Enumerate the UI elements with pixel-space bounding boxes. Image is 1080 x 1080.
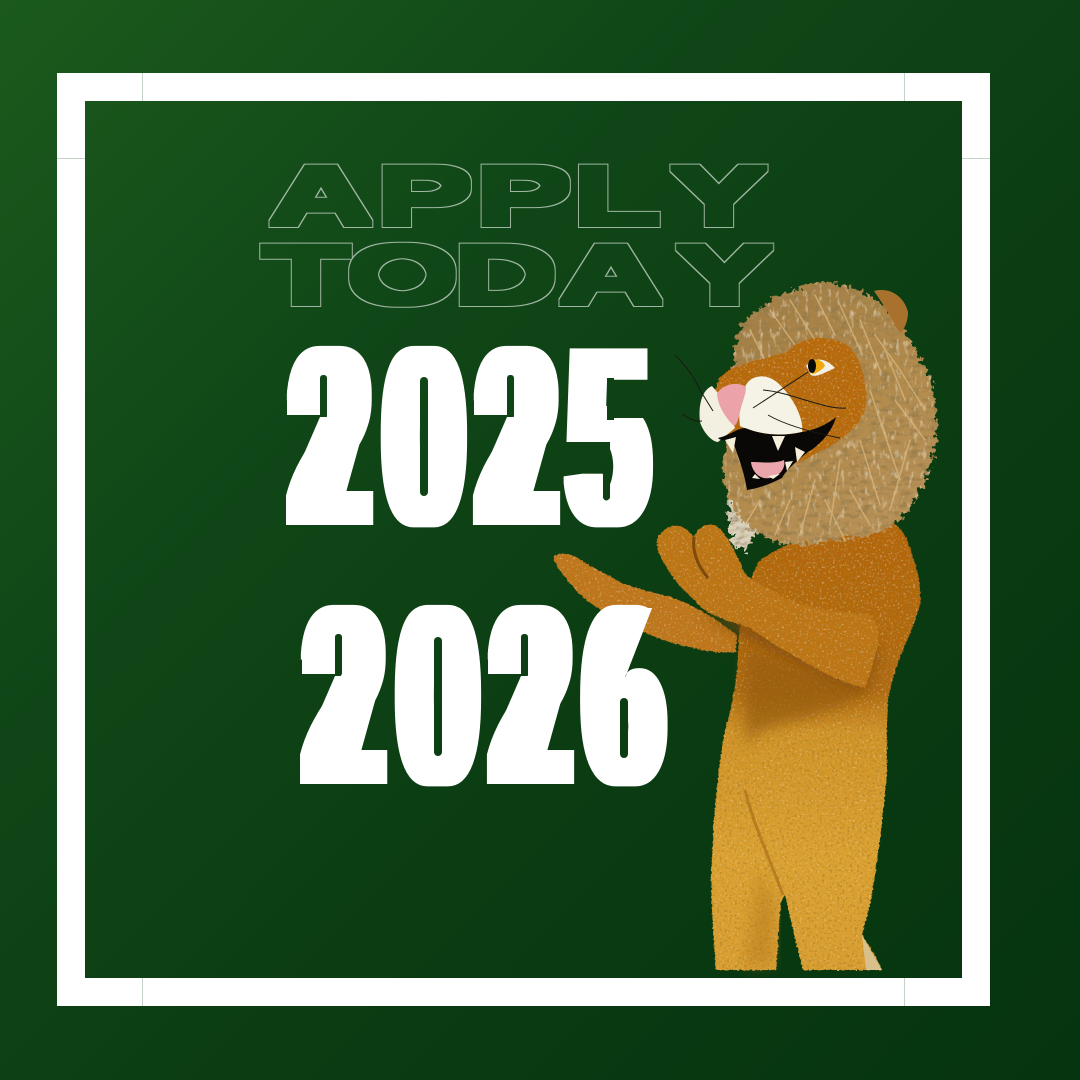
years 2025 and 2026	[291, 298, 663, 834]
body shadow under arm	[745, 650, 870, 745]
year 2026: 2026	[305, 557, 663, 834]
year 2025: 2025	[291, 298, 647, 575]
APPLY: APPLY	[270, 150, 766, 242]
mane	[723, 281, 937, 545]
tongue	[751, 460, 784, 478]
paw finger crease	[694, 537, 708, 578]
teeth	[725, 436, 805, 479]
leg shade	[745, 870, 775, 965]
white square frame	[57, 73, 990, 1006]
mane strands	[745, 295, 925, 540]
body and legs	[711, 515, 921, 970]
right muzzle	[739, 376, 802, 434]
leg crease	[745, 790, 783, 895]
left muzzle	[700, 386, 735, 442]
tail tuft	[862, 935, 882, 970]
far arm visible beside the digit 6	[625, 606, 680, 678]
outlined heading: APPLY TODAY	[263, 150, 772, 321]
eye	[806, 359, 835, 376]
lion mascot	[553, 281, 937, 970]
white chest fur	[727, 490, 770, 550]
mouth	[718, 417, 836, 490]
digit shape refinements	[287, 375, 656, 758]
far arm	[553, 554, 737, 653]
near arm shadow	[700, 612, 880, 692]
near arm and paw	[657, 525, 879, 688]
nose	[717, 384, 746, 426]
ear	[874, 290, 908, 333]
whiskers	[675, 355, 846, 438]
face	[712, 338, 866, 466]
TODAY: TODAY	[263, 229, 772, 321]
